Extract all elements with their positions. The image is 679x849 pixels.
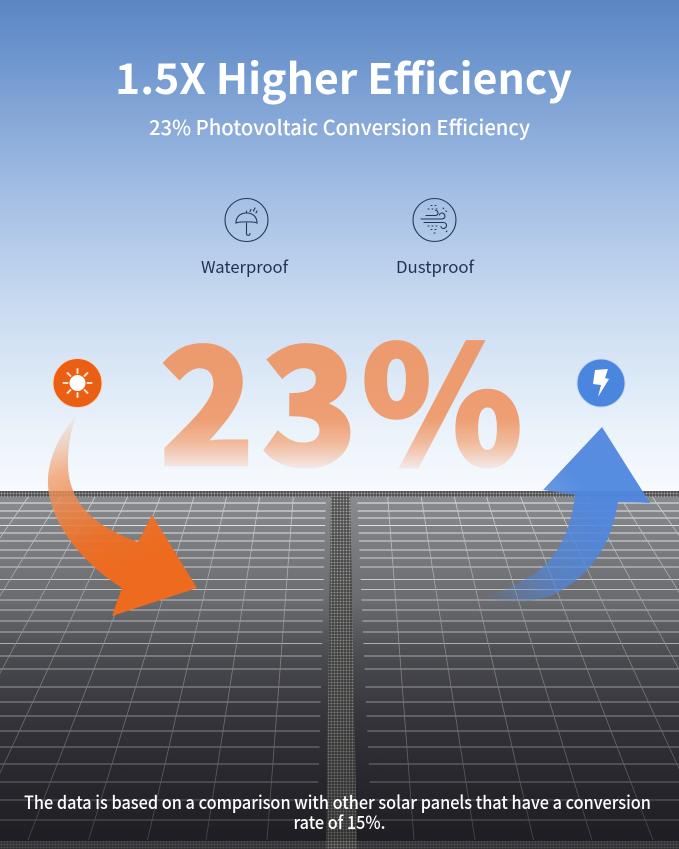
arrow: electricity out (blue) (480, 427, 650, 601)
subtitle: 23% Photovoltaic Conversion Efficiency (149, 111, 530, 141)
big number 23%: % (361, 276, 523, 512)
title: 1.5X Higher Efficiency (115, 46, 572, 107)
central stitched seam (326, 492, 357, 849)
footnote: rate of 15%. (294, 809, 386, 835)
label: Dustproof: Dustproof (396, 254, 475, 278)
vertical cell lines (0, 495, 679, 840)
big number 23% (159, 276, 523, 512)
label: Waterproof: Waterproof (201, 254, 289, 278)
icon: lightning bolt badge (577, 359, 625, 407)
central seam margin (317, 495, 372, 840)
arrow: sunlight in (orange) (48, 416, 197, 616)
icon: dustproof wind (413, 198, 456, 242)
top stitched edge (0, 491, 679, 497)
panel surface (0, 492, 679, 849)
sky background (0, 0, 679, 496)
icon: waterproof umbrella (225, 198, 268, 242)
big number 23%: 2 (159, 276, 255, 512)
horizontal cell lines (0, 503, 679, 820)
bottom stitched edge (0, 841, 679, 849)
seam shading (326, 492, 357, 849)
big number 23%: 3 (261, 276, 358, 512)
icon: sun badge (53, 358, 102, 408)
solar panels (0, 491, 679, 849)
